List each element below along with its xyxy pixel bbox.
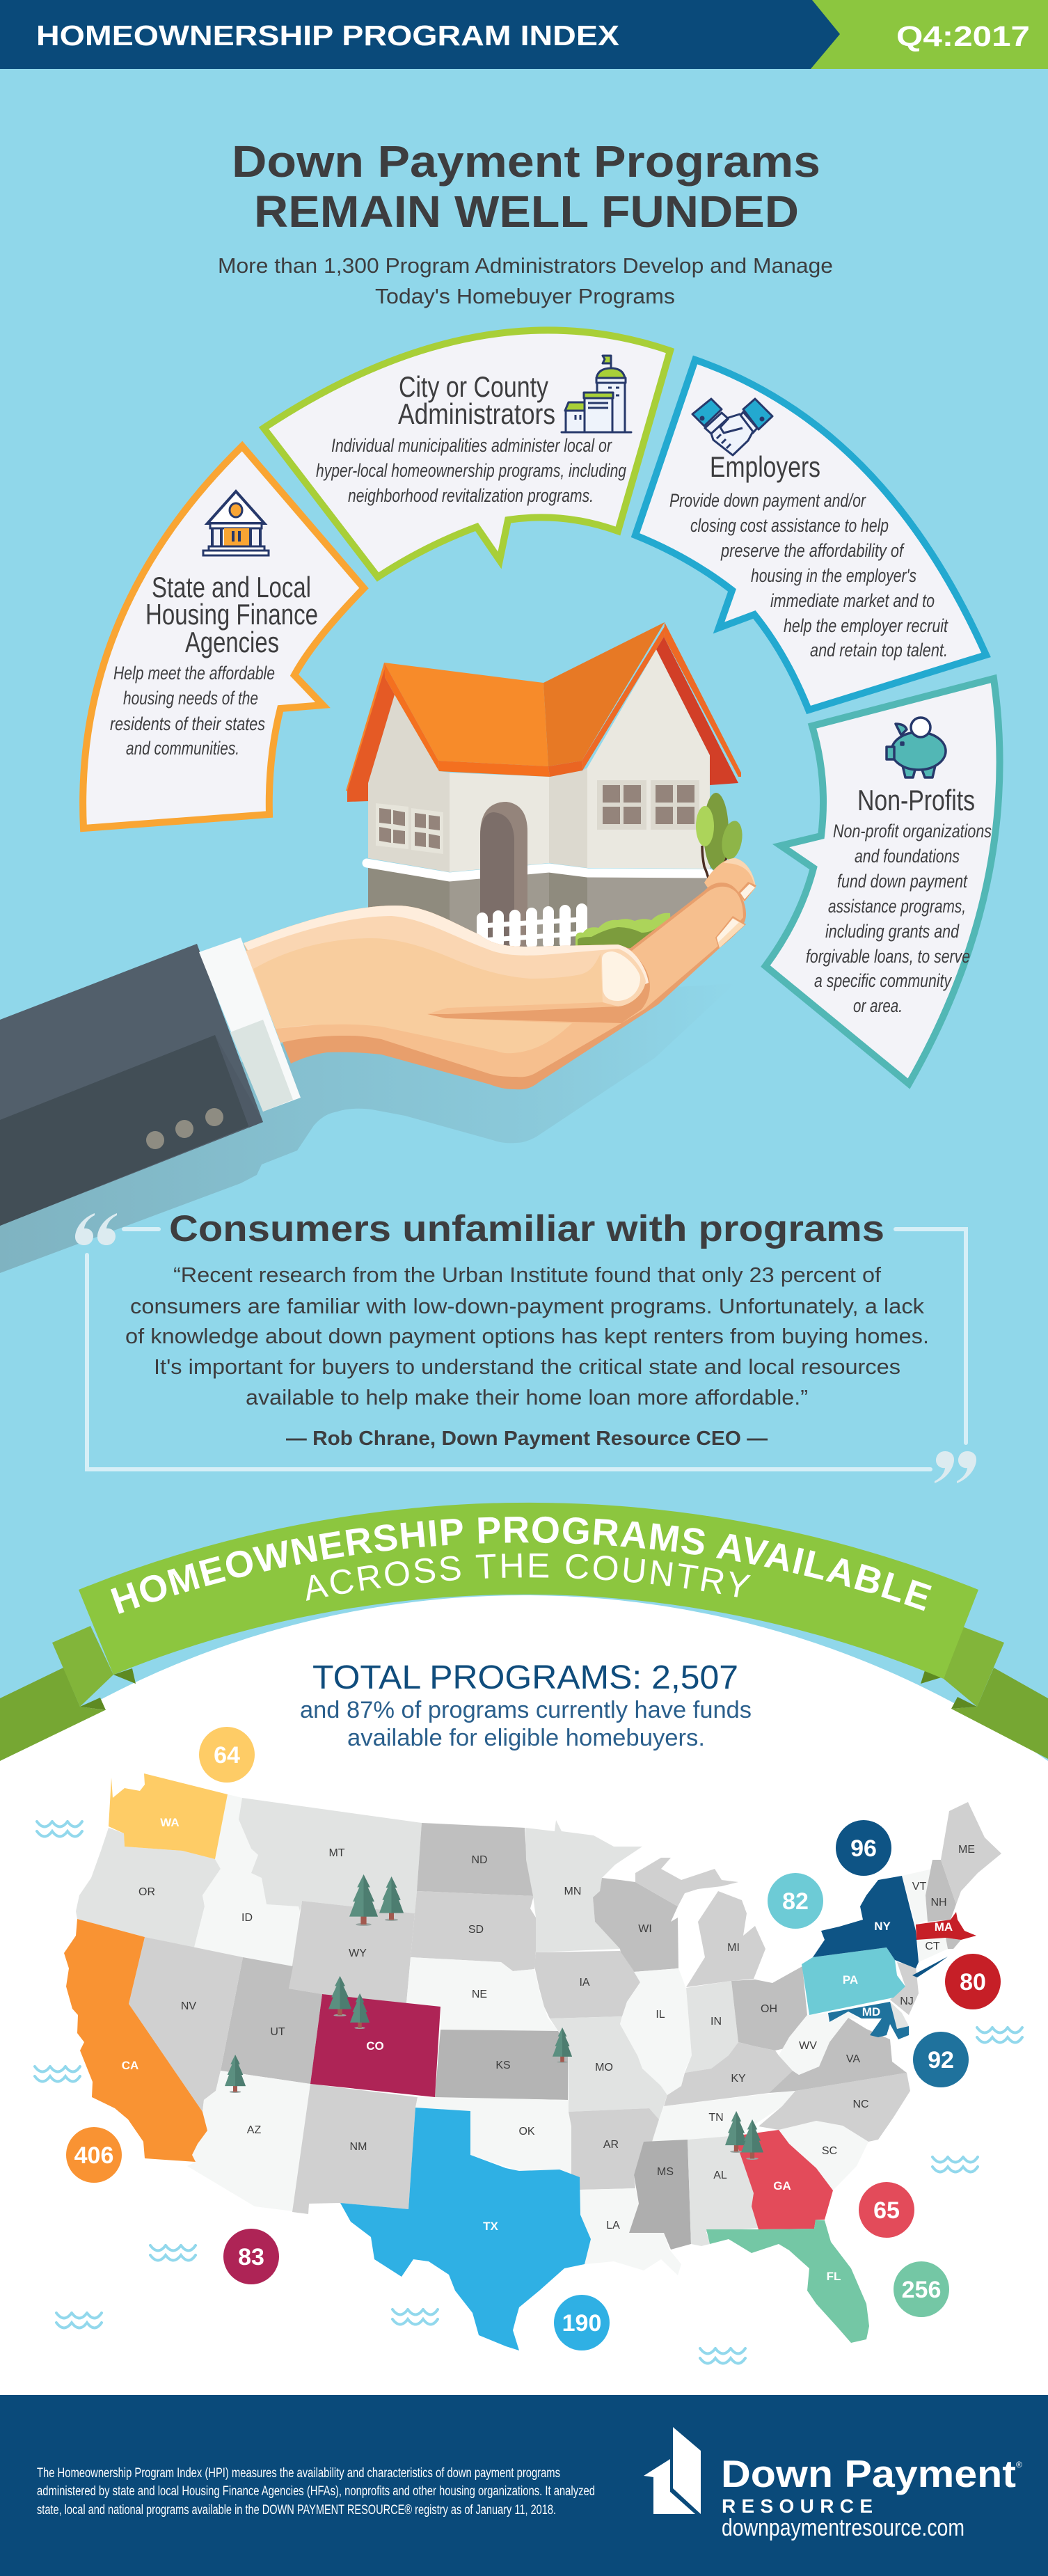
logo mark [644,2427,701,2514]
thumb rim and crease [427,957,650,1023]
banner subtitle: ACROSS THE COUNTRY [306,1554,751,1601]
main title [232,136,820,237]
state labels: MD [862,2005,880,2018]
panel heading: Housing Finance [145,598,318,631]
shirt cuff [199,938,301,1112]
program count: Massachusetts [945,1954,1001,2009]
subtitle: More than 1,300 Program Administrators Develop and Manage [218,253,833,278]
highlighted state: California [64,1919,207,2162]
panel heading: Administrators [398,397,555,430]
state labels: TN [708,2112,724,2124]
state labels: MA [935,1920,953,1934]
hand main [244,887,743,1077]
panel text [806,821,992,1016]
program count: New York: 96 [850,1835,877,1862]
house walls [367,649,710,950]
panel text: neighborhood revitalization programs. [348,485,594,506]
panel text: and retain top talent. [810,640,948,661]
panel text: hyper-local homeownership programs, including [316,460,626,481]
state labels: ND [471,1854,488,1866]
state labels: KS [495,2060,511,2071]
sleeve buttons [146,1108,223,1149]
state labels: OR [138,1886,155,1898]
panel text: Provide down payment and/or [669,490,866,511]
logo wordmark: RESOURCE [722,2495,873,2517]
state labels: MO [595,2062,613,2073]
icon: closing quote mark [935,1451,976,1483]
program count: Georgia: 65 [873,2197,900,2224]
state labels: TX [483,2220,499,2233]
main title: Down Payment Programs [232,136,820,187]
state labels: VA [846,2053,860,2065]
footer note: The Homeownership Program Index (HPI) measures the availability and characteristics of down payment programs [37,2466,560,2481]
state labels: WY [349,1947,367,1959]
fence [477,903,587,949]
program count: Texas [554,2295,610,2350]
panel: non-profits [765,679,1000,1084]
state labels: OH [761,2003,777,2015]
state labels: LA [606,2220,620,2231]
panel heading: State and Local [152,571,311,603]
program count: Washington [199,1727,255,1783]
panel text: Non-profit organizations [833,821,992,841]
header title: HOMEOWNERSHIP PROGRAM INDEX [36,19,619,52]
footer note [37,2466,595,2518]
state labels: NV [181,2000,196,2012]
program count: Georgia [859,2182,914,2238]
logo wordmark: Down Payment [721,2452,1016,2495]
panel text: Individual municipalities administer local or [331,435,612,456]
state labels: IL [656,2009,665,2021]
program count: Massachusetts: 80 [960,1969,986,1996]
state labels [122,1816,975,2283]
state labels: AZ [247,2124,261,2136]
panel text: residents of their states [110,713,265,734]
highlighted state: Florida [706,2220,869,2343]
state labels: MN [564,1886,581,1897]
total programs: TOTAL PROGRAMS: 2,507 [312,1659,738,1696]
quote text: available to help make their home loan more affordable.” [246,1385,808,1409]
state labels: CO [366,2039,384,2053]
panel text: help the employer recruit [784,615,948,636]
highlighted state: Texas [340,2108,591,2350]
state labels: PA [843,1973,858,1986]
quote text [125,1263,929,1409]
state labels: KY [731,2073,746,2085]
program count: Florida: 256 [902,2277,941,2303]
program count: Washington: 64 [214,1742,240,1769]
panel heading: City or County [399,370,548,403]
panel text: or area. [853,995,903,1016]
panel text: housing needs of the [123,688,258,709]
state labels: NH [930,1897,947,1909]
panel text: closing cost assistance to help [690,515,889,536]
panel text [669,490,948,661]
total programs note: available for eligible homebuyers. [347,1725,705,1751]
panel text [110,663,275,759]
program count: Maryland: 92 [928,2047,954,2073]
shadow of hand [0,983,735,1273]
state labels: VT [912,1881,926,1893]
state labels: ID [241,1912,253,1924]
sleeve [0,938,301,1226]
state labels: WI [638,1923,652,1935]
banner title: HOMEOWNERSHIP PROGRAMS AVAILABLE [111,1516,932,1614]
highlighted state: Washington [109,1773,228,1859]
thumbnail [602,951,640,1001]
house windows [376,780,699,854]
bush [575,913,672,948]
state labels: IA [579,1977,590,1989]
map of the United States [35,1727,1022,2364]
panel text [316,435,626,506]
subtitle: Today's Homebuyer Programs [375,284,675,308]
state labels: FL [827,2270,841,2283]
tree [696,793,745,885]
program count: Pennsylvania [768,1873,823,1929]
quote text: “Recent research from the Urban Institute found that only 23 percent of [173,1263,881,1287]
quote text: It's important for buyers to understand the critical state and local resources [154,1354,900,1379]
state labels: CA [122,2059,138,2072]
highlighted state: Georgia [738,2130,833,2229]
icon: bank [203,491,269,555]
state labels: GA [773,2179,791,2192]
illustration: house [346,622,741,950]
panel text: and foundations [855,846,960,867]
highlighted state: Massachusetts [916,1912,976,1940]
panel: state and local housing finance agencies [83,446,364,828]
program count: California: 406 [74,2142,113,2169]
header date: Q4:2017 [896,20,1030,52]
state labels: WV [799,2040,817,2052]
state labels: IN [710,2016,722,2028]
panel text: housing in the employer's [751,565,916,586]
logo wordmark [721,2452,1022,2541]
footer note: state, local and national programs available in the DOWN PAYMENT RESOURCE® registry as of January 11, 2018. [37,2503,556,2518]
subtitle [218,253,833,308]
total programs note [300,1697,752,1751]
state labels: UT [270,2026,285,2038]
main title: REMAIN WELL FUNDED [254,187,799,237]
panel text: and communities. [126,738,239,759]
program count: California [66,2127,122,2183]
panel text: immediate market and to [770,590,935,611]
state labels: NC [852,2099,869,2110]
panel text: preserve the affordability of [720,540,905,561]
state labels: AR [603,2139,619,2151]
state labels: NM [350,2141,367,2153]
panel text: Help meet the affordable [113,663,275,683]
trees [225,1874,763,2160]
fingernail [715,916,746,949]
house roof [346,622,741,802]
icon: handshake [692,399,772,455]
water waves [35,1822,1022,2364]
state labels: WA [160,1816,180,1829]
state labels: SC [822,2145,837,2157]
house door [480,802,527,950]
panel text: fund down payment [837,871,968,892]
palm [253,938,603,1053]
panel heading: Employers [710,450,820,483]
state labels: SD [468,1924,484,1936]
quote heading: Consumers unfamiliar with programs [169,1208,884,1249]
icon: opening quote mark [75,1213,117,1245]
white map area [0,1595,1048,2395]
icon: city buildings [562,356,631,432]
program count: New York [836,1820,891,1876]
state labels: NE [472,1989,487,2000]
panel text: forgivable loans, to serve [806,946,970,967]
panel: city or county administrators [264,330,670,577]
total programs note: and 87% of programs currently have funds [300,1697,752,1723]
hand silhouette [244,883,746,1089]
panel heading: Non-Profits [857,784,975,816]
quote attribution: — Rob Chrane, Down Payment Resource CEO — [286,1428,768,1450]
banner ribbon [0,1502,1048,1761]
highlighted state: Maryland [828,2002,909,2039]
icon: piggy bank [887,718,946,777]
quote frame [87,1229,966,1469]
state labels: ME [958,1844,975,1856]
highlighted state: Pennsylvania [802,1947,905,2015]
state labels: NY [874,1920,891,1933]
state labels: MT [328,1847,345,1859]
program count: Pennsylvania: 82 [782,1888,809,1915]
panel text: assistance programs, [828,896,966,917]
back finger [704,858,756,901]
state labels: CT [925,1941,940,1952]
panel text: a specific community [814,970,952,991]
state labels: MI [727,1942,740,1954]
highlighted state: Colorado [310,1994,440,2097]
program count: Florida [894,2261,949,2317]
state labels: MS [657,2166,674,2178]
header bar [0,0,1048,69]
quote text: consumers are familiar with low-down-payment programs. Unfortunately, a lack [130,1294,925,1318]
panel heading [145,571,318,658]
program count: Texas: 190 [562,2310,601,2337]
highlighted state: New York [813,1876,948,1977]
state labels: AL [713,2170,727,2181]
program count: Maryland [913,2032,969,2087]
illustration: hand [244,858,756,1089]
program count: Colorado: 83 [238,2244,264,2270]
state labels: NJ [900,1996,914,2007]
panel: employers [635,360,986,710]
panel heading: Agencies [185,626,279,658]
state labels: OK [518,2126,535,2138]
quote text: of knowledge about down payment options has kept renters from buying homes. [125,1324,929,1348]
panel text: including grants and [825,921,960,942]
logo wordmark: ® [1016,2460,1022,2470]
panel heading [398,370,555,430]
footer note: administered by state and local Housing Finance Agencies (HFAs), nonprofits and other housing organizations. It analyzed [37,2484,595,2499]
footer [0,2395,1048,2576]
logo wordmark: downpaymentresource.com [722,2515,964,2541]
program count: Colorado [223,2229,279,2284]
